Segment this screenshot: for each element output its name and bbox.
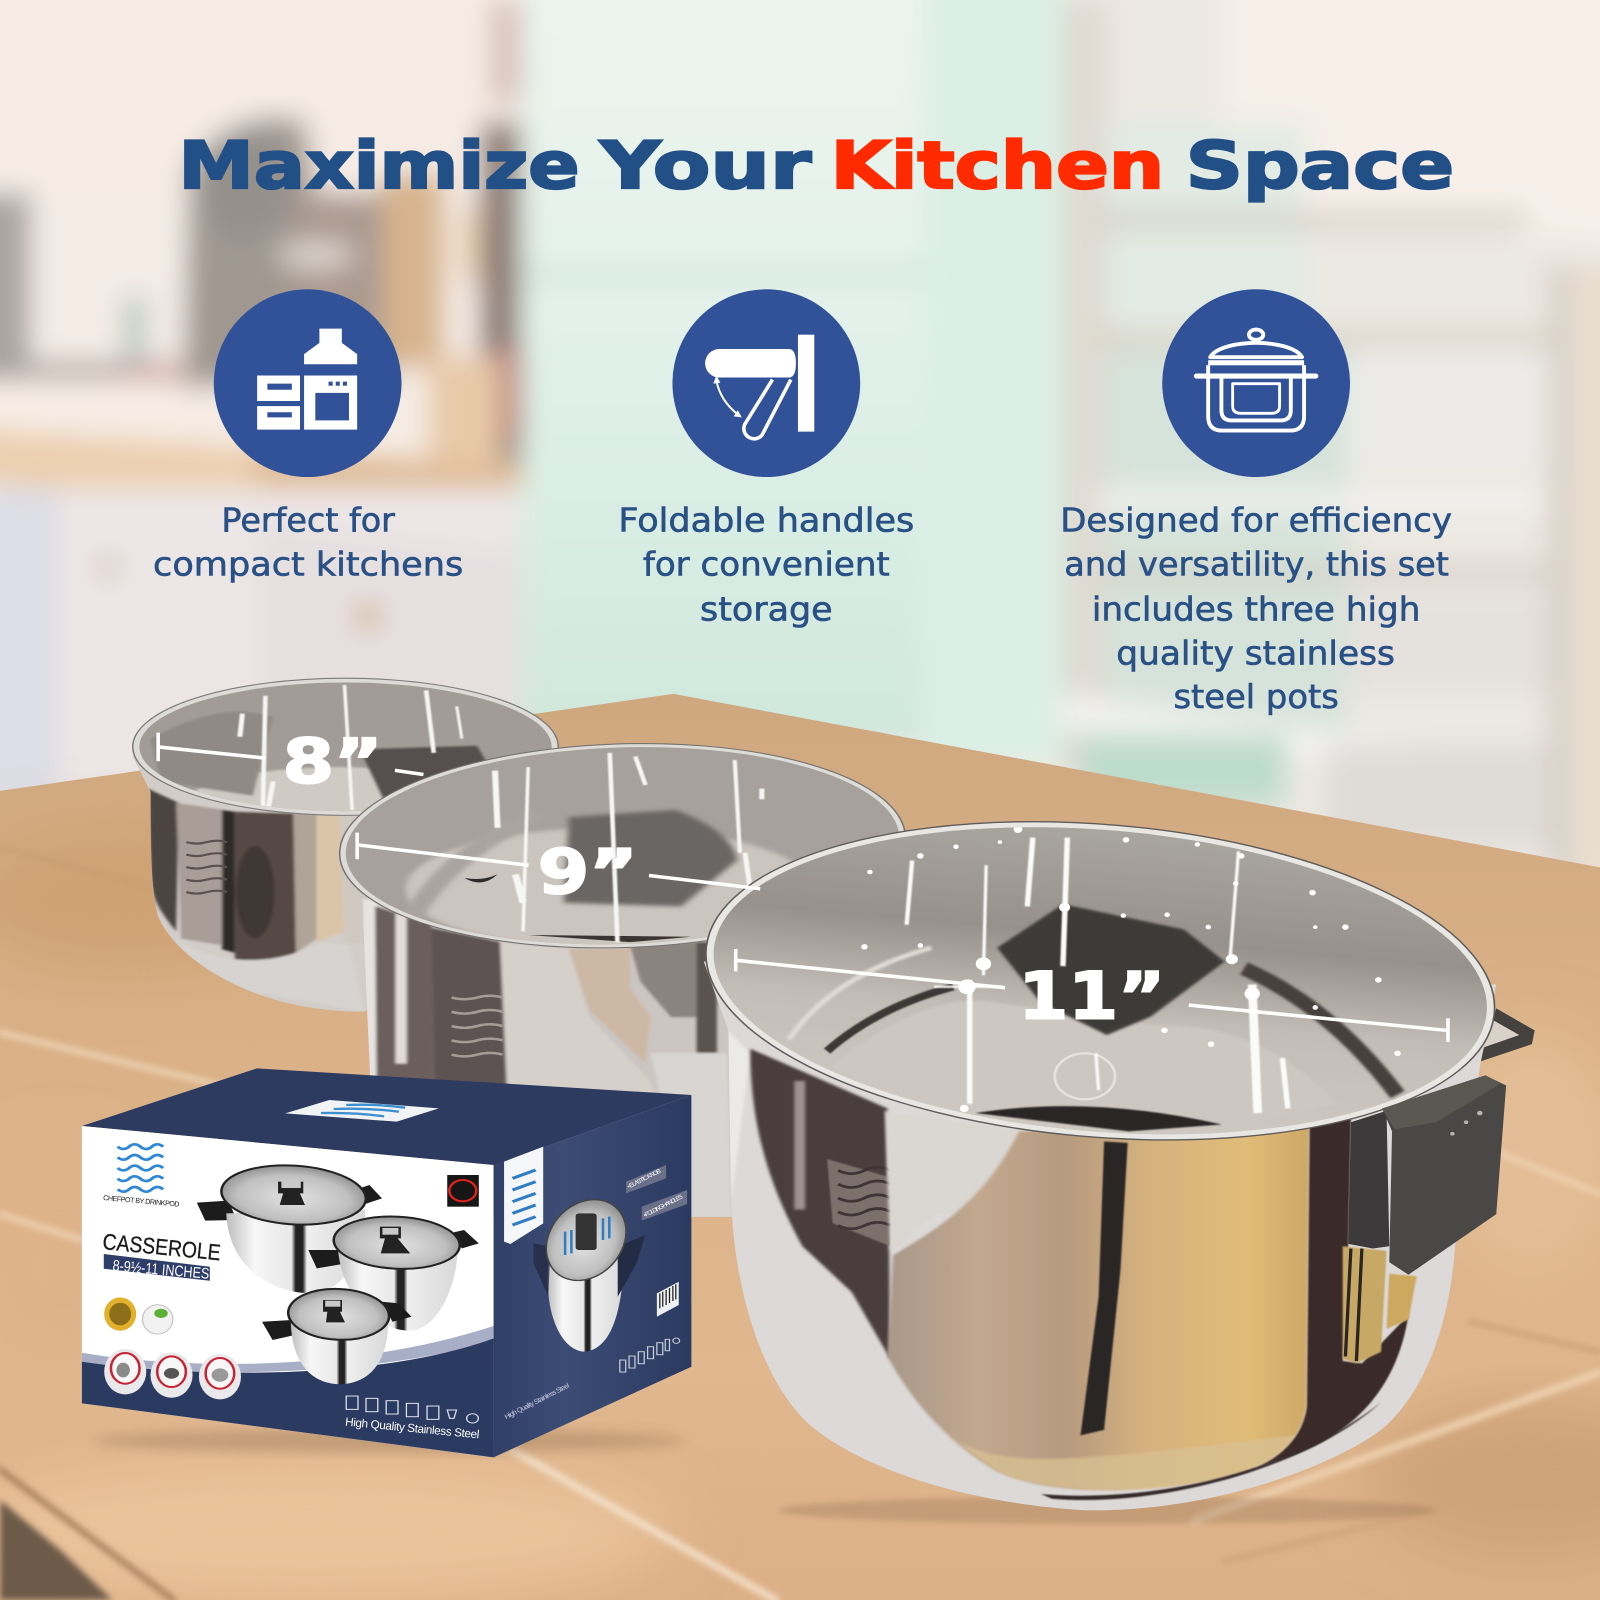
box: side pot image xyxy=(548,1247,624,1352)
box: printed text: 8-9½-11 INCHES xyxy=(112,1257,210,1283)
title: Maximize xyxy=(179,128,580,204)
marker: 8 inch: 8” xyxy=(283,727,383,798)
pot: 9 inch xyxy=(332,734,913,1221)
box: printed text: • FOLDING HANDLES xyxy=(643,1193,684,1219)
box: feature badges xyxy=(104,1349,241,1399)
pot handle front xyxy=(1348,1075,1506,1275)
box: top face xyxy=(82,1068,691,1165)
box: printed text: High Quality Stainless Steel xyxy=(345,1416,480,1441)
caption: stainless steel set: quality stainless xyxy=(1116,634,1395,672)
box: quality seals xyxy=(104,1297,136,1331)
box: medium pot xyxy=(308,1213,479,1331)
pot handle back xyxy=(1480,1008,1535,1062)
wooden table xyxy=(0,694,1600,1600)
box: printed text: • ELASTIC KNOB xyxy=(626,1168,662,1191)
caption: stainless steel set: includes three high xyxy=(1092,590,1420,628)
pot: 11 inch with handle xyxy=(687,791,1535,1524)
feature: stainless steel set xyxy=(1060,289,1452,716)
product box xyxy=(82,1068,691,1457)
box: care icons xyxy=(346,1396,478,1423)
box: printed text xyxy=(102,1168,684,1441)
caption: stainless steel set: steel pots xyxy=(1173,678,1339,716)
caption: stainless steel set: Designed for efficiency xyxy=(1060,502,1452,540)
title: Your xyxy=(599,128,812,204)
marker: 11 inch xyxy=(735,949,1449,1042)
box: logo waves xyxy=(118,1144,163,1192)
caption: foldable handles: for convenient xyxy=(643,546,890,584)
box: size tag xyxy=(104,1254,210,1281)
box: large pot xyxy=(197,1161,382,1293)
box: small pot xyxy=(262,1286,411,1384)
caption: foldable handles: storage xyxy=(700,590,833,628)
title: Space xyxy=(1186,128,1454,204)
icon: kitchen cabinets and hood xyxy=(214,289,402,477)
marker: 11 inch: 11” xyxy=(1018,958,1165,1034)
marker: 8 inch xyxy=(158,727,423,798)
box: front face xyxy=(82,1126,494,1457)
box: barcode xyxy=(657,1282,679,1317)
size markers xyxy=(158,727,1449,1042)
icon: cooking pot xyxy=(1162,289,1350,477)
caption: stainless steel set: and versatility, this set xyxy=(1064,546,1449,584)
title: Kitchen xyxy=(831,128,1164,204)
caption: foldable handles: Foldable handles xyxy=(618,502,914,540)
icon: folding handle xyxy=(672,289,860,477)
caption: compact kitchens xyxy=(153,502,463,584)
box: printed text: CASSEROLE xyxy=(102,1229,222,1265)
box: printed text: High Quality Stainless Steel xyxy=(503,1381,571,1421)
caption: foldable handles xyxy=(618,502,914,628)
caption: compact kitchens: Perfect for xyxy=(221,502,395,540)
pot: 8 inch xyxy=(130,678,569,1017)
caption: compact kitchens: compact kitchens xyxy=(153,546,463,584)
caption: stainless steel set xyxy=(1060,502,1452,716)
feature: foldable handles xyxy=(618,289,914,628)
box: induction badge xyxy=(447,1175,479,1207)
box: right face xyxy=(494,1095,691,1457)
feature: compact kitchens xyxy=(153,289,463,584)
title xyxy=(179,128,1454,204)
marker: 9 inch xyxy=(357,833,760,908)
box: printed text: CHEFPOT BY DRINKPOD xyxy=(103,1194,180,1209)
marker: 9 inch: 9” xyxy=(538,837,638,908)
